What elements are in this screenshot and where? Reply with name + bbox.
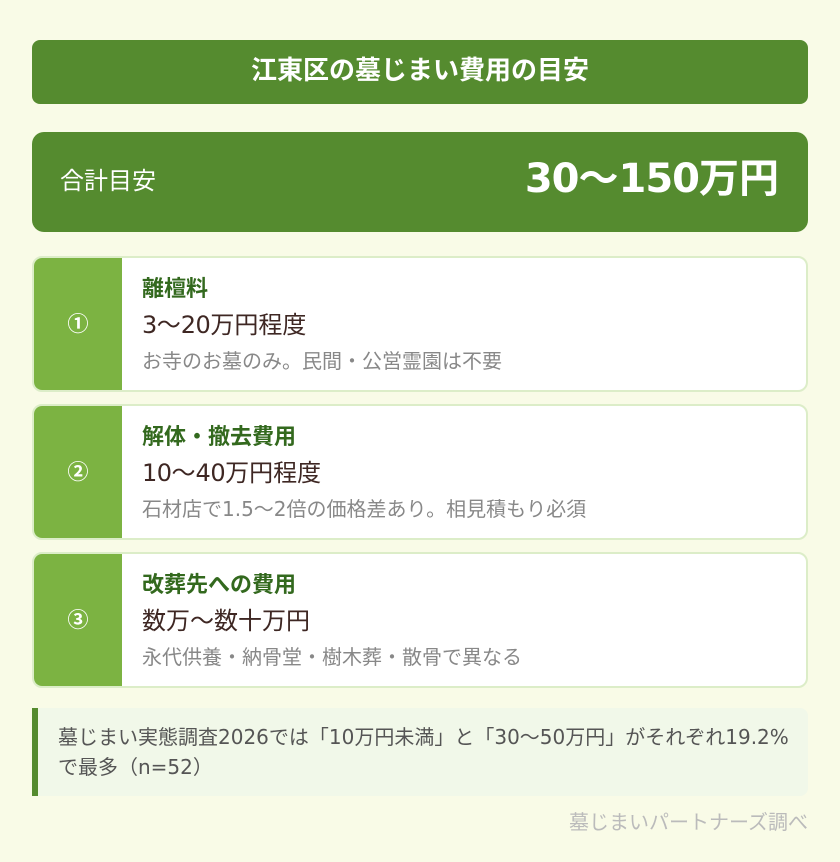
panel: total estimate (32, 132, 808, 232)
item 3 amount: 数万〜数十万円 (142, 607, 310, 635)
item 2 amount: 10〜40万円程度 (142, 459, 321, 487)
panel: item 2 (32, 404, 808, 540)
source credit: 墓じまいパートナーズ調べ (569, 810, 808, 834)
item 1 amount: 3〜20万円程度 (142, 311, 306, 339)
number badge 1 (34, 258, 122, 390)
title: 江東区の墓じまい費用の目安 (251, 56, 589, 86)
item 3 heading: 改葬先への費用 (142, 573, 296, 598)
item 1 heading: 離檀料 (142, 277, 208, 302)
number badge 1: ① (68, 308, 88, 338)
panel: item 3 (32, 552, 808, 688)
number badge 3 (34, 554, 122, 686)
callout: survey note: 墓じまい実態調査2026では「10万円未満」と「30〜50万円」がそれぞれ19.2% (58, 725, 789, 749)
number badge 3: ③ (68, 604, 88, 634)
total amount: 30〜150万円 (525, 156, 779, 202)
item 2 heading: 解体・撤去費用 (142, 425, 296, 450)
callout: survey note (32, 708, 808, 796)
item 2 note: 石材店で1.5〜2倍の価格差あり。相見積もり必須 (142, 497, 586, 521)
total label: 合計目安 (60, 167, 156, 195)
panel: item 1 (32, 256, 808, 392)
item 3 note: 永代供養・納骨堂・樹木葬・散骨で異なる (142, 645, 522, 669)
item 1 note: お寺のお墓のみ。民間・公営霊園は不要 (142, 349, 502, 373)
number badge 2: ② (68, 456, 88, 486)
title (32, 40, 808, 104)
number badge 2 (34, 406, 122, 538)
callout: survey note: で最多（n=52） (58, 755, 213, 779)
